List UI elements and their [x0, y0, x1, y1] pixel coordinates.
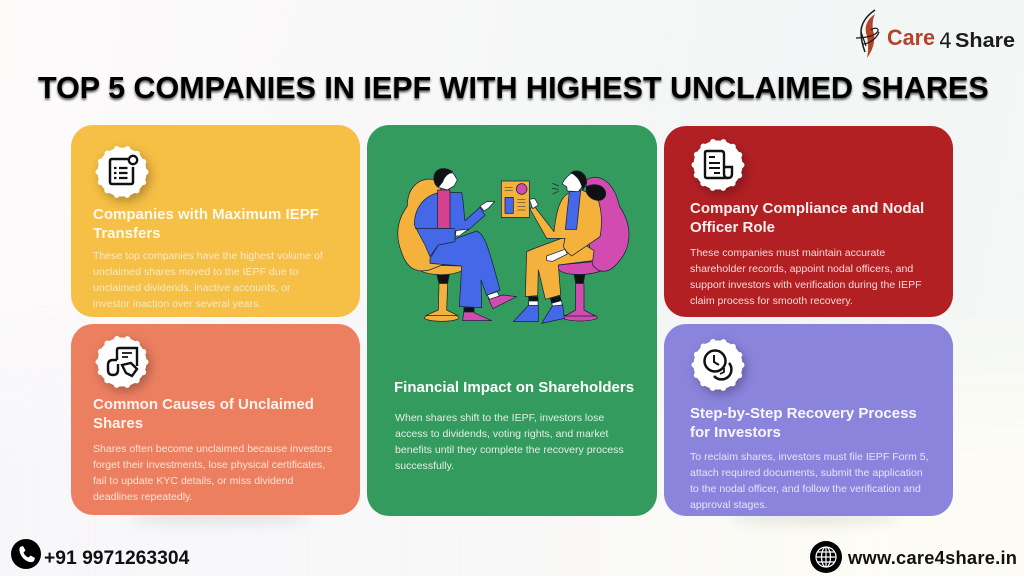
text block: fail to update KYC details, or miss dividend	[93, 475, 294, 487]
heading: Transfers	[93, 224, 161, 242]
text block: approval stages.	[690, 499, 767, 511]
document	[501, 181, 529, 217]
panel: step-by-step recovery process	[664, 324, 953, 516]
text block	[690, 247, 922, 307]
icon: document scroll	[692, 139, 750, 198]
heading	[93, 206, 319, 242]
text block: These top companies have the highest volume of	[93, 250, 323, 262]
text block: unclaimed shares moved to the IEPF due to	[93, 266, 298, 278]
text block: investor inaction over several years.	[93, 298, 261, 310]
text block	[395, 412, 624, 472]
logo: Care4Share: 4	[939, 29, 952, 53]
text block: forget their investments, lose physical certificates,	[93, 459, 325, 471]
panel: companies with maximum IEPF transfers	[71, 125, 360, 317]
logo: Care4Share	[856, 9, 1015, 58]
logo: Care4Share: Share	[955, 29, 1015, 52]
heading	[93, 396, 314, 432]
text block: To reclaim shares, investors must file IEPF Form 5,	[690, 451, 929, 463]
illustration: two people in conversation	[397, 168, 630, 324]
icon: globe	[810, 541, 842, 573]
panel: company compliance and nodal officer role	[664, 126, 953, 317]
heading: Officer Role	[690, 218, 775, 236]
text block: support investors with verification during the IEPF	[690, 279, 922, 291]
text block: successfully.	[395, 460, 454, 472]
website: www.care4share.in	[848, 547, 1017, 568]
right chair	[558, 177, 629, 321]
text block: access to dividends, voting rights, and market	[395, 428, 608, 440]
left chair	[398, 179, 463, 321]
text block	[690, 451, 929, 511]
text block: unclaimed dividends, inactive accounts, or	[93, 282, 291, 294]
heading: Company Compliance and Nodal	[690, 200, 924, 217]
phone number: +91 9971263304	[44, 548, 189, 569]
title: TOP 5 COMPANIES IN IEPF WITH HIGHEST UNCLAIMED SHARES	[38, 71, 989, 105]
heading: for Investors	[690, 424, 781, 440]
text block: benefits until they complete the recovery process	[395, 444, 624, 456]
heading: Step-by-Step Recovery Process	[690, 405, 917, 422]
icon: certificate and tag	[94, 336, 156, 396]
icon: clocks	[690, 339, 752, 399]
heading: Common Causes of Unclaimed	[93, 396, 314, 413]
heading	[690, 405, 917, 440]
text block: When shares shift to the IEPF, investors lose	[395, 412, 604, 424]
text block: to the nodal officer, and follow the verification and	[690, 483, 921, 495]
text block: attach required documents, submit the application	[690, 467, 923, 479]
heading: Shares	[93, 414, 143, 432]
logo: Care4Share: Care	[887, 25, 935, 50]
panel: financial impact on shareholders	[367, 125, 657, 516]
text block: deadlines repeatedly.	[93, 491, 192, 503]
text block: claim process for smooth recovery.	[690, 295, 853, 307]
man	[414, 169, 517, 321]
text block	[93, 250, 323, 310]
heading	[690, 200, 924, 236]
icon: document list	[94, 146, 156, 206]
text block: Shares often become unclaimed because investors	[93, 443, 332, 455]
woman	[513, 171, 606, 323]
heading: Financial Impact on Shareholders	[394, 379, 634, 396]
text block: These companies must maintain accurate	[690, 247, 885, 259]
panel: common causes of unclaimed shares	[71, 324, 360, 515]
text block: shareholder records, appoint nodal officers, and	[690, 263, 913, 275]
text block	[93, 443, 332, 503]
icon: phone	[11, 539, 41, 569]
heading: Companies with Maximum IEPF	[93, 206, 319, 223]
